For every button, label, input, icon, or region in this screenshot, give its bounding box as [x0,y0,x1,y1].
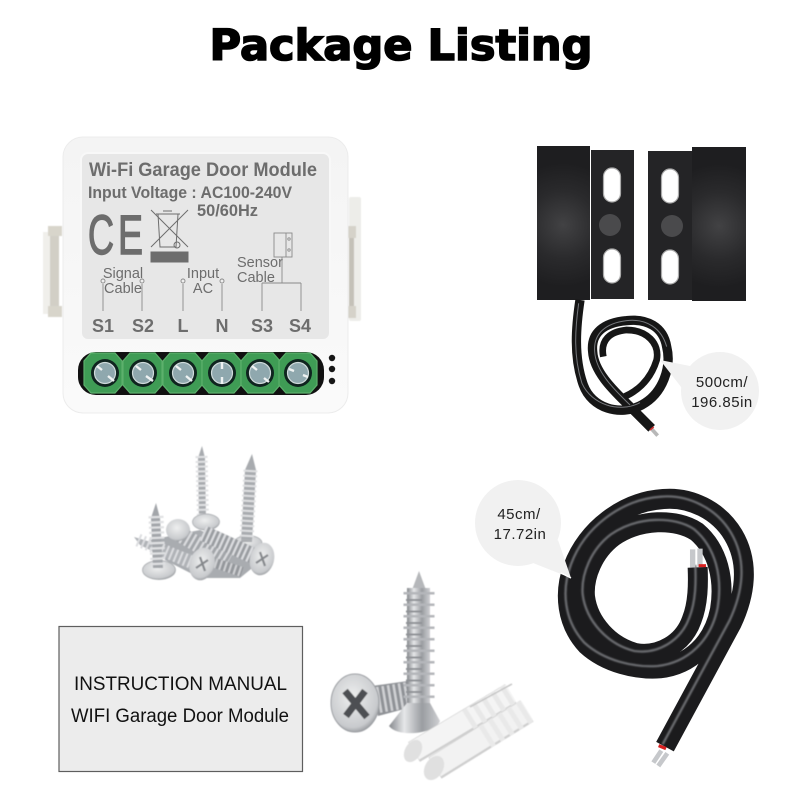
panel: Wi-Fi garage door module [43,137,361,413]
callout: 500cm: 500cm/ [696,374,748,391]
callout: 500cm: 196.85in [691,394,753,411]
frequency text: 50/60Hz [197,202,258,220]
panel: instruction manual [59,626,302,772]
callout: 45cm: 45cm/ [497,506,541,523]
panel: 45cm cable [475,480,744,766]
icon: crossed-out bin [151,210,188,262]
panel: wall screws and anchors [331,571,528,784]
sensor left block [537,146,590,300]
terminal labels: N [216,316,228,336]
sensor right plate [648,151,692,300]
module body [63,137,348,413]
left mounting clip [43,226,62,317]
screw B [234,454,262,550]
input AC label: AC [193,281,213,297]
terminal labels [92,316,311,336]
indicator holes [329,355,335,384]
manual text line 1: INSTRUCTION MANUAL [74,674,287,695]
screw D [134,537,198,574]
callout: 45cm: 17.72in [494,526,546,543]
manual text line 2: WIFI Garage Door Module [71,706,289,727]
terminal labels: S1 [92,316,114,336]
sensor cable [576,300,668,436]
screw C with cross head [142,503,218,583]
terminal labels: S2 [132,316,154,336]
terminal labels: S3 [251,316,273,336]
wall anchors [400,684,528,784]
input AC label: Input [187,266,219,282]
callout: 500cm [660,352,759,430]
countersunk screw lying down [331,674,408,732]
terminal block [78,352,324,395]
sensor right block [692,147,746,301]
shadow mass behind screws [150,530,262,578]
manual sheet [59,626,302,772]
CE mark: E [118,203,143,266]
screw E [166,519,228,562]
signal cable label: Cable [104,281,142,297]
module heading: Wi-Fi Garage Door Module [89,160,317,181]
screw A [192,446,220,530]
tall wood screw [389,571,440,733]
right mounting clip [338,197,361,321]
panel: small pan-head screws [134,446,278,583]
panel: magnetic sensor [537,146,759,436]
wiring diagram lines [101,233,301,311]
sensor cable label: Cable [237,270,275,286]
sensor left plate [591,150,634,299]
signal cable label: Signal [103,266,143,282]
sensor cable label: Sensor [237,255,283,271]
terminal labels: L [178,316,188,336]
callout: 45cm [475,480,571,578]
label plate [81,153,330,340]
screw F [203,533,278,578]
cable coil [566,496,744,766]
CE mark: C [88,203,114,266]
title: Package Listing [210,21,592,71]
terminal labels: S4 [289,316,311,336]
input voltage text: Input Voltage : AC100-240V [88,184,292,202]
